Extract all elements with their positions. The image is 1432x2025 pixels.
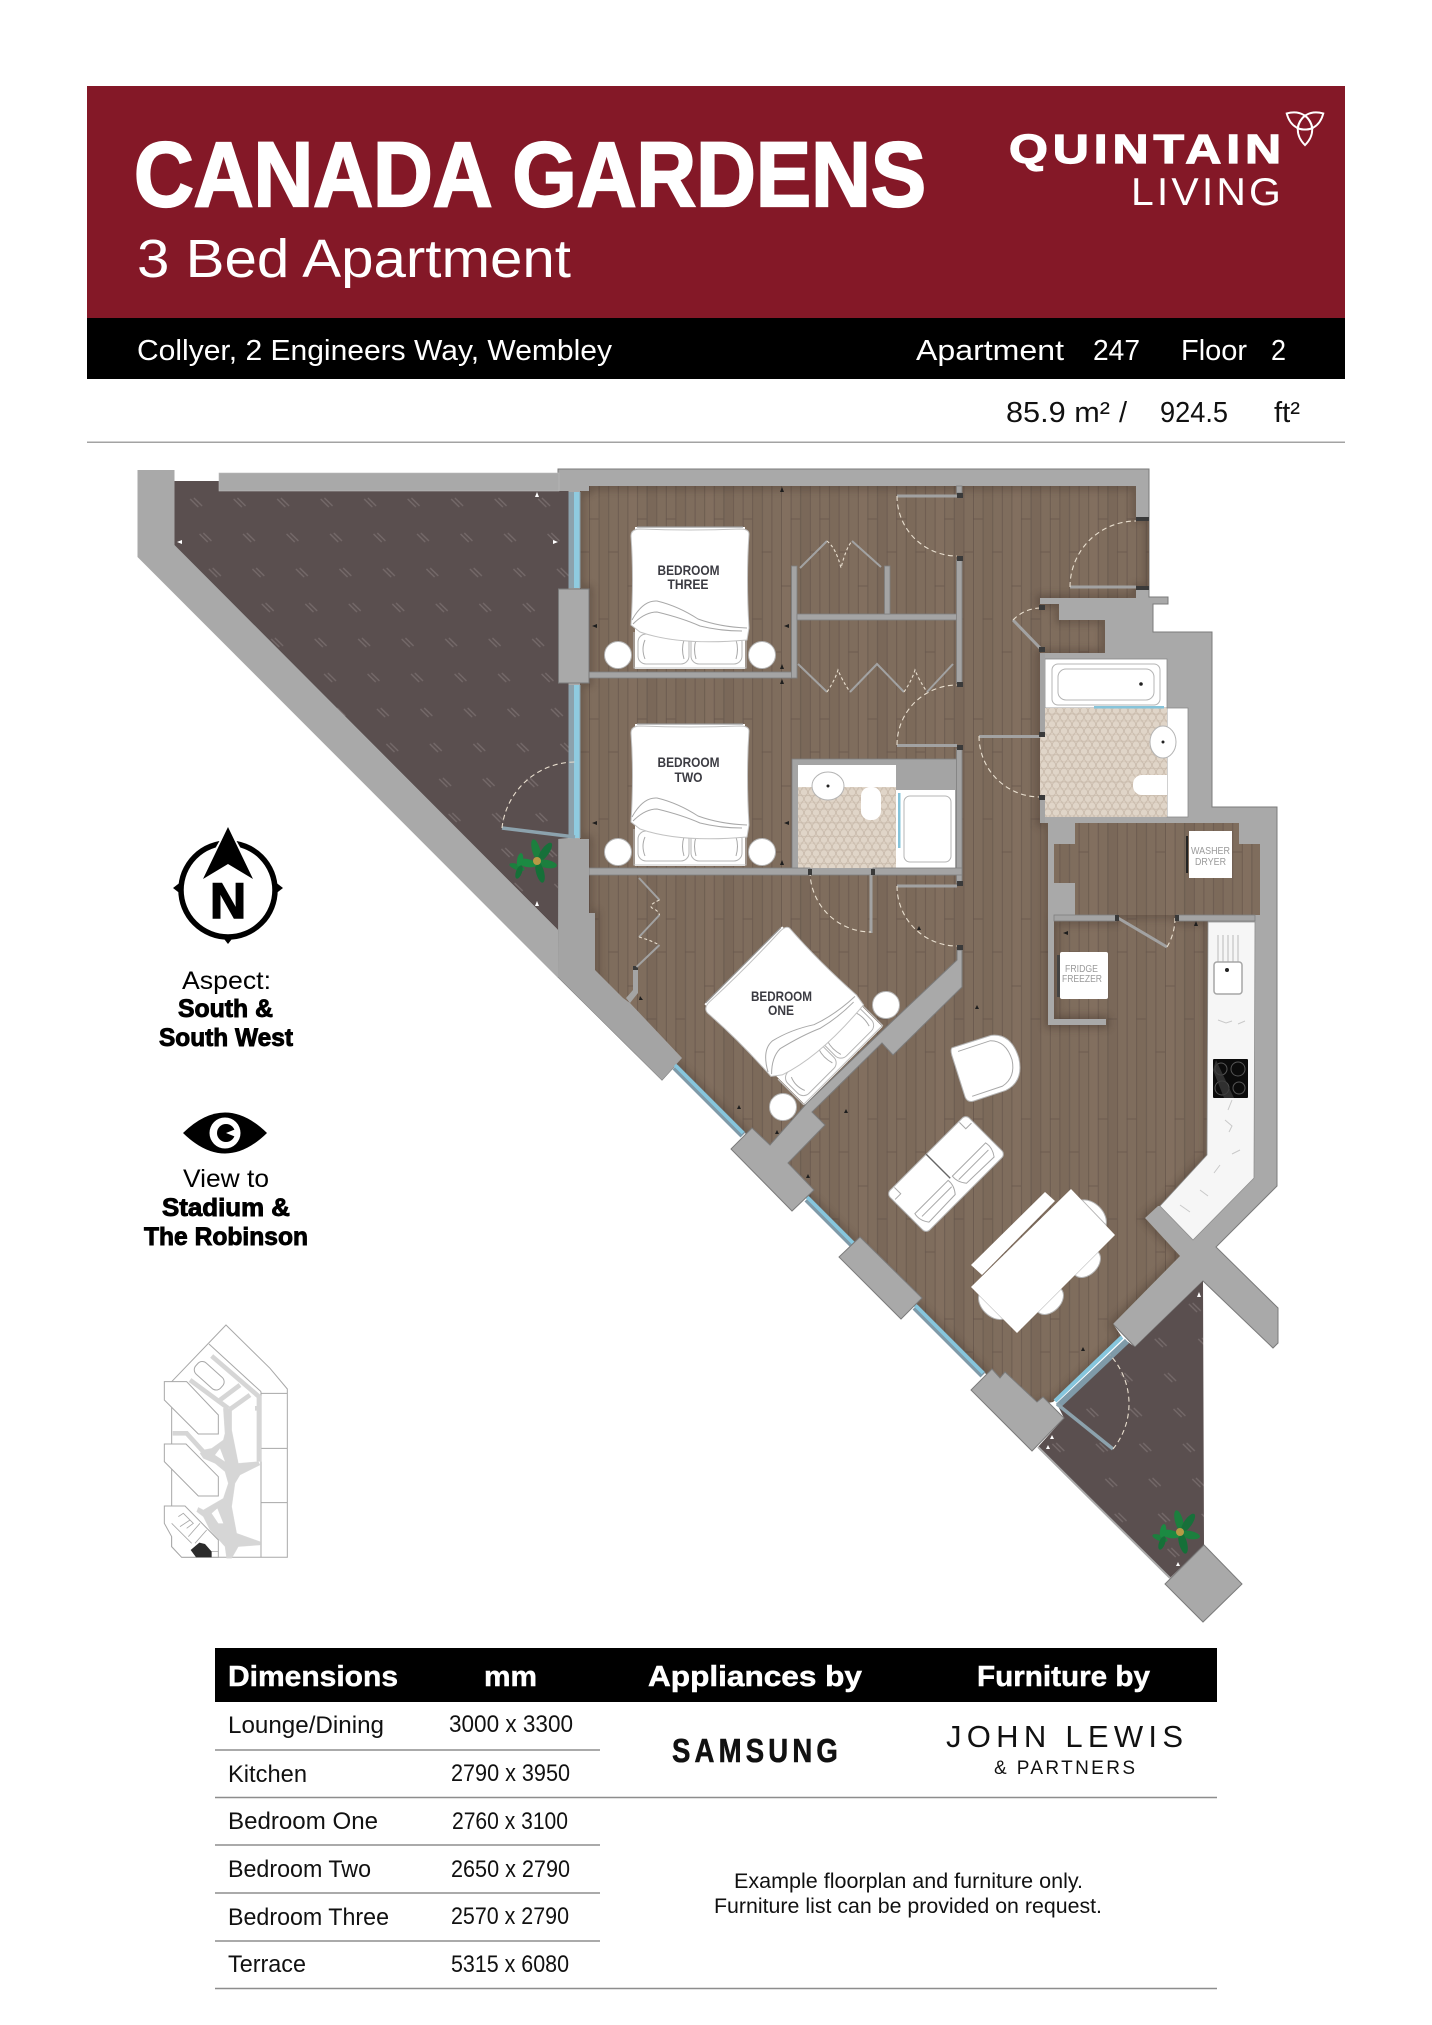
table header: Appliances by xyxy=(648,1661,862,1693)
bathroom: en suite xyxy=(792,759,962,875)
address: Collyer, 2 Engineers Way, Wembley xyxy=(137,335,613,367)
furniture: dining set xyxy=(971,1189,1115,1333)
note: Furniture list can be provided on request. xyxy=(714,1894,1102,1918)
subtitle: 3 Bed Apartment xyxy=(137,229,571,289)
furniture: bedroom two bed xyxy=(604,724,776,866)
fridge freezer: FREEZER xyxy=(1062,973,1102,985)
fixings xyxy=(592,487,1252,1351)
kitchen worktop xyxy=(1160,922,1255,1240)
room dimensions: 2650 x 2790 xyxy=(451,1856,570,1883)
view text xyxy=(144,1165,308,1251)
furniture: bedroom one bed: BEDROOM xyxy=(751,989,812,1004)
apartment number xyxy=(916,335,1286,367)
utility: washer dryer: DRYER xyxy=(1195,856,1226,868)
exterior wall shell xyxy=(558,469,1278,1348)
furniture: bedroom two bed: BEDROOM xyxy=(658,755,720,770)
furniture: bedroom two bed: TWO xyxy=(674,770,703,785)
header banner xyxy=(87,86,1345,318)
logo: Quintain Living xyxy=(1009,107,1327,214)
area: ft² xyxy=(1274,397,1300,429)
view text: The Robinson xyxy=(144,1223,308,1251)
room dimensions: 2570 x 2790 xyxy=(451,1903,569,1930)
compass icon: N xyxy=(210,873,246,929)
area xyxy=(1006,397,1300,429)
timber floor xyxy=(580,486,1260,1408)
note: Example floorplan and furniture only. xyxy=(734,1869,1083,1893)
room names: Bedroom One xyxy=(228,1808,378,1835)
furniture: bedroom three bed: BEDROOM xyxy=(658,563,720,578)
doors xyxy=(502,493,1179,1449)
room dimensions: 3000 x 3300 xyxy=(449,1711,573,1738)
logo: John Lewis: & PARTNERS xyxy=(994,1758,1135,1779)
view text: View to xyxy=(183,1165,269,1193)
room names: Terrace xyxy=(228,1951,306,1978)
logo: Quintain Living: QUINTAIN xyxy=(1009,126,1286,172)
logo: Samsung: SAMSUNG xyxy=(672,1732,842,1769)
windows xyxy=(568,492,1127,1406)
utility: washer dryer: WASHER xyxy=(1191,845,1230,857)
room dimensions: 2790 x 3950 xyxy=(451,1760,570,1787)
note xyxy=(714,1869,1102,1918)
compass icon xyxy=(173,826,283,944)
room names xyxy=(228,1712,389,1978)
room names: Bedroom Three xyxy=(228,1904,389,1931)
logo: John Lewis: JOHN LEWIS xyxy=(946,1719,1183,1754)
specification table xyxy=(215,1648,1217,1988)
terrace: upper xyxy=(138,470,568,978)
fridge freezer: FRIDGE xyxy=(1065,963,1098,975)
interior walls xyxy=(558,486,1255,1080)
plant: upper terrace xyxy=(508,838,558,884)
table rules xyxy=(215,1750,1217,1988)
area: / xyxy=(1119,397,1128,429)
furniture: bedroom three bed: THREE xyxy=(668,577,708,592)
furniture: sofa xyxy=(887,1115,1005,1233)
room dimensions: 5315 x 6080 xyxy=(451,1951,569,1978)
plant: lower terrace xyxy=(1151,1509,1201,1555)
room dimensions xyxy=(449,1711,573,1978)
view text: Stadium & xyxy=(162,1194,290,1222)
furniture: bedroom one bed: ONE xyxy=(768,1003,794,1018)
terrace: lower xyxy=(1038,1281,1242,1622)
table header: mm xyxy=(484,1661,537,1693)
furniture: bedroom three bed xyxy=(604,527,776,669)
logo: Quintain Living: LIVING xyxy=(1131,171,1284,214)
structural piers xyxy=(731,950,1064,1451)
table header: Dimensions xyxy=(228,1661,398,1693)
room dimensions: 2760 x 3100 xyxy=(452,1808,568,1835)
fridge freezer xyxy=(1057,952,1108,999)
aspect text: South West xyxy=(159,1024,294,1052)
aspect text xyxy=(159,967,294,1052)
bathroom: main xyxy=(1040,659,1188,817)
apartment number: Floor xyxy=(1181,335,1247,367)
title: CANADA GARDENS xyxy=(134,124,926,226)
table header: Furniture by xyxy=(977,1661,1150,1693)
area: 85.9 m² xyxy=(1006,397,1110,429)
site key plan xyxy=(164,1325,287,1558)
apartment number: Apartment xyxy=(916,335,1064,367)
table header xyxy=(215,1648,1217,1702)
room names: Bedroom Two xyxy=(228,1856,371,1883)
aspect text: Aspect: xyxy=(182,967,271,995)
apartment number: 247 xyxy=(1093,335,1140,367)
view eye icon xyxy=(183,1112,267,1154)
room names: Lounge/Dining xyxy=(228,1712,384,1739)
furniture: bedroom one bed xyxy=(702,924,900,1120)
aspect text: South & xyxy=(178,995,273,1023)
floorplan xyxy=(138,469,1278,1622)
apartment number: 2 xyxy=(1271,335,1286,367)
wardrobes xyxy=(636,541,953,967)
furniture: armchair xyxy=(949,1030,1027,1103)
logo: John Lewis xyxy=(946,1719,1183,1779)
address bar xyxy=(87,318,1345,379)
area: 924.5 xyxy=(1160,397,1228,429)
utility: washer dryer xyxy=(1186,831,1232,878)
room names: Kitchen xyxy=(228,1761,307,1788)
